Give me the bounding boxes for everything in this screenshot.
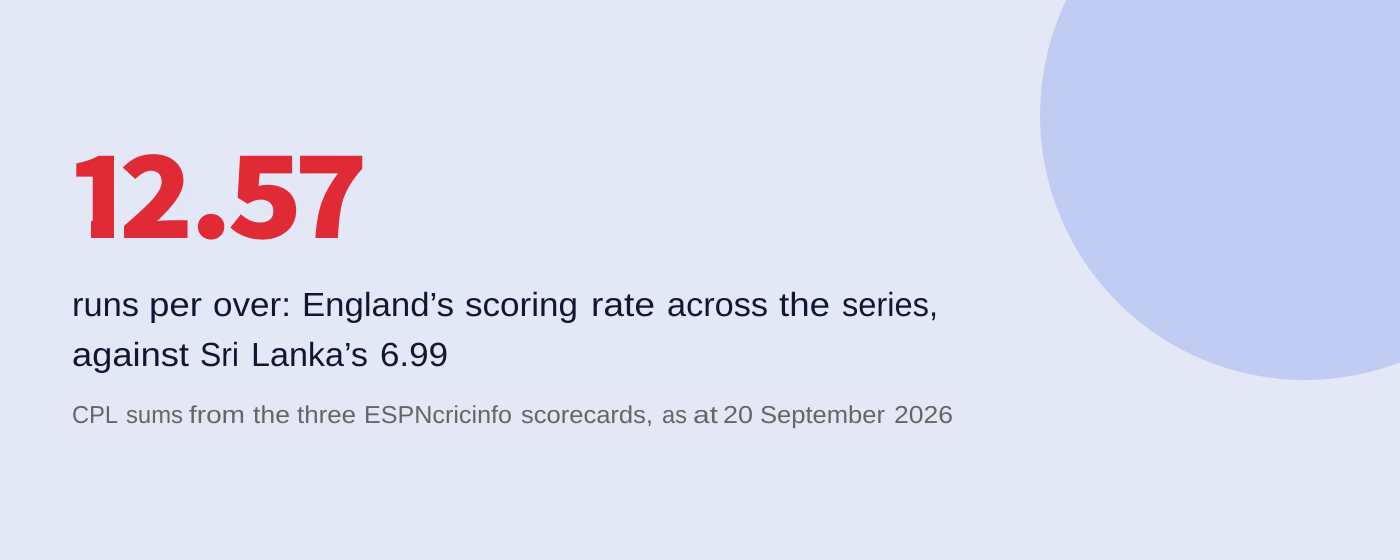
headline number: .: [190, 108, 232, 270]
description text: against: [72, 337, 190, 374]
source note: as: [662, 402, 687, 429]
headline number: 5: [228, 108, 302, 270]
description text: runs: [72, 287, 139, 324]
headline number: 2: [120, 108, 193, 270]
decorative circle: [1040, 0, 1400, 380]
description text: Lanka’s: [251, 337, 368, 374]
source note: sums: [126, 402, 183, 429]
source note: 2026: [894, 402, 953, 429]
description text: series,: [842, 287, 938, 324]
source note: [72, 402, 953, 429]
infographic canvas: [73, 0, 1400, 428]
description text: scoring: [465, 287, 578, 324]
source note: scorecards,: [521, 402, 653, 429]
source note: the: [253, 402, 290, 429]
description text: across: [667, 287, 768, 324]
description text: rate: [591, 287, 655, 324]
headline number: [76, 154, 362, 240]
headline number: 7: [294, 108, 367, 270]
source note: three: [297, 402, 356, 429]
source note: September: [760, 402, 885, 429]
description text: Sri: [200, 337, 239, 374]
source note: from: [189, 402, 245, 429]
source note: ESPNcricinfo: [364, 402, 512, 429]
source note: CPL: [72, 402, 118, 429]
headline number: 1: [65, 108, 138, 270]
source note: 20: [723, 402, 753, 429]
description text: 6.99: [380, 337, 448, 374]
description text: per: [149, 287, 202, 324]
description text: the: [779, 287, 830, 324]
source note: at: [693, 402, 718, 429]
description text: [72, 287, 938, 374]
description text: over:: [213, 287, 291, 324]
description text: England’s: [302, 287, 454, 324]
